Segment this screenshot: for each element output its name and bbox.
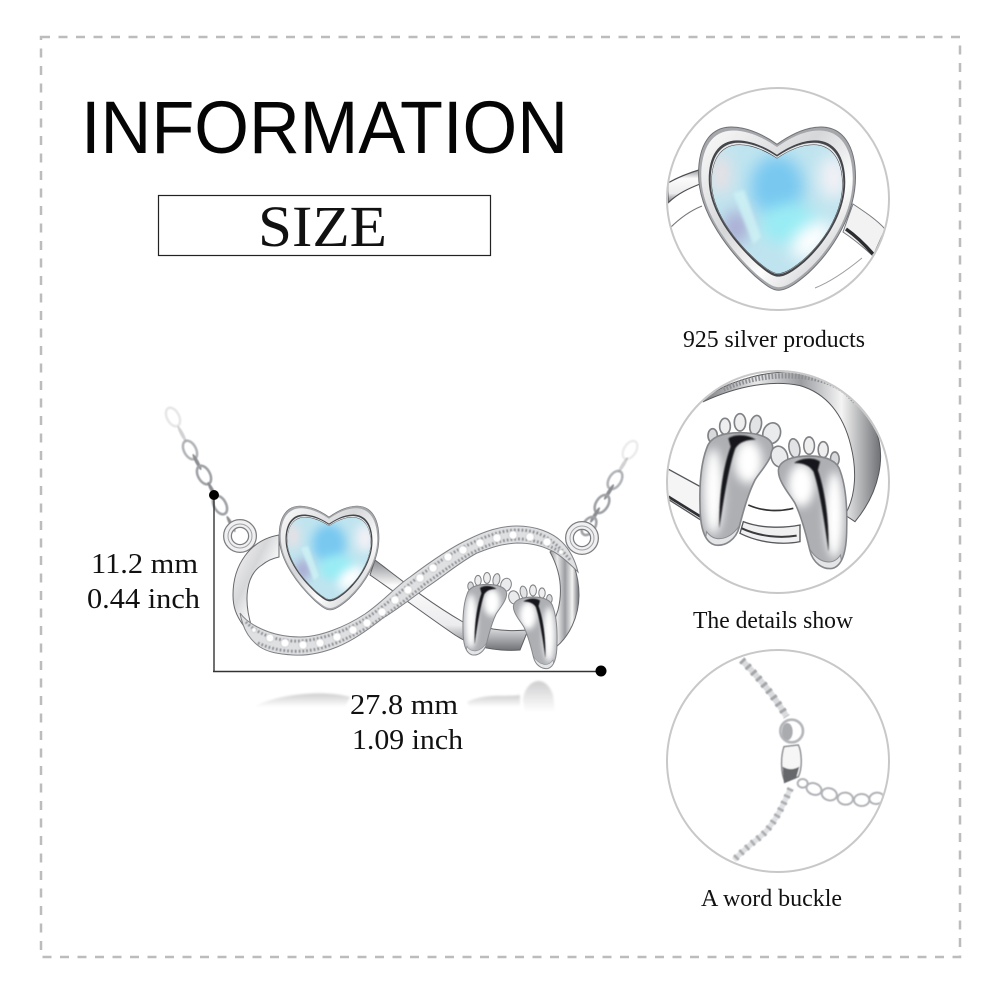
title: INFORMATION: [81, 86, 568, 169]
reflection under necklace: [253, 681, 555, 712]
size heading box: SIZE: [258, 194, 387, 259]
necklace: left chain: [163, 405, 237, 533]
caption: buckle: A word buckle: [701, 886, 842, 912]
height label: [87, 548, 201, 615]
infinity pendant: [233, 526, 579, 655]
necklace: right chain: [579, 438, 640, 538]
lower chain: [734, 788, 791, 860]
left loop: [233, 535, 279, 628]
dimension lines: [209, 490, 606, 676]
size heading box: [158, 194, 490, 259]
ring: [780, 720, 803, 742]
caption: silver: 925 silver products: [683, 327, 865, 353]
right chain: [798, 779, 885, 806]
diamond band: [240, 526, 578, 655]
necklace: jump rings: [228, 524, 594, 550]
lobster clasp: [782, 745, 801, 782]
right foot: [507, 585, 557, 673]
left foot: [463, 573, 513, 659]
detail circle: clasp: [667, 650, 889, 872]
baby feet: [463, 573, 557, 673]
height label: 11.2 mm: [91, 548, 198, 580]
upper chain: [742, 660, 787, 717]
detail circle: feet: [667, 371, 889, 593]
crossing strand: [370, 560, 528, 650]
heart moonstone: [279, 506, 379, 610]
width label: 27.8 mm: [350, 689, 458, 721]
width label: [350, 689, 464, 756]
width label: 1.09 inch: [352, 724, 464, 756]
caption: details: The details show: [693, 608, 854, 634]
height label: 0.44 inch: [87, 583, 201, 615]
detail circle: heart: [667, 88, 889, 310]
right loop: [548, 545, 579, 650]
